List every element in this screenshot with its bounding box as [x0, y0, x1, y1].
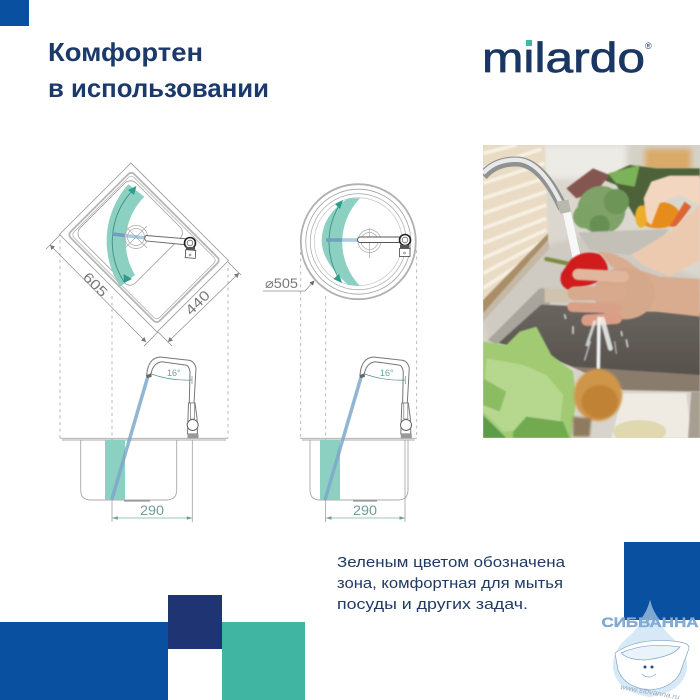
side view: round sink — [300, 357, 417, 522]
faucet top view — [145, 236, 196, 258]
upper hand and arm — [631, 176, 700, 277]
vegetables on counter — [566, 165, 700, 255]
zone arrow — [112, 186, 136, 283]
plan view: round sink — [263, 184, 417, 500]
angle 16 degrees: 16° — [167, 368, 181, 378]
side view: rectangular sink — [60, 357, 228, 522]
comfort zone — [105, 440, 125, 500]
washing hands — [572, 251, 700, 320]
drain — [356, 228, 384, 258]
dimension 440: 440 — [182, 287, 213, 318]
dimension 605: 605 — [80, 269, 111, 300]
decorative corner square — [0, 0, 29, 26]
description text: зона, комфортная для мытья — [337, 575, 563, 592]
onion — [573, 369, 622, 437]
drain — [353, 500, 377, 502]
comfort zone — [320, 440, 340, 500]
watermark: Sibvanna — [602, 600, 699, 700]
photo: washing vegetables under a faucet — [483, 145, 700, 443]
decorative squares bottom left — [0, 595, 305, 700]
bathtub — [615, 640, 689, 690]
white tray — [612, 392, 700, 438]
faucet top view — [358, 234, 410, 256]
sink outline — [60, 163, 228, 332]
dimension 290 — [326, 440, 405, 522]
description text: Зеленым цветом обозначена — [337, 554, 566, 571]
water spray — [326, 238, 358, 242]
comfort zone arc — [107, 184, 144, 287]
lettuce — [483, 327, 576, 438]
diameter label — [263, 276, 314, 291]
logo: milardo: milardo — [482, 34, 645, 81]
dimension 440 — [158, 262, 241, 346]
plan view: rectangular sink — [46, 163, 241, 500]
droplet — [613, 600, 687, 697]
sink basin — [488, 288, 700, 392]
water stream — [325, 375, 362, 500]
water splash — [565, 315, 628, 368]
decorative square bottom right — [624, 542, 700, 620]
dashed guides — [60, 240, 228, 500]
water stream — [112, 375, 148, 500]
dimension 290: 290 — [353, 502, 377, 518]
zone arrow — [329, 200, 343, 283]
title: в использовании — [48, 73, 269, 103]
url: www.sibvanna.ru — [620, 684, 680, 700]
logo: milardo: ® — [645, 41, 652, 51]
wordmark: СИБВАННА — [602, 615, 699, 630]
drain — [124, 500, 150, 502]
round sink outline — [301, 184, 416, 299]
faucet side — [359, 357, 412, 438]
dimension 290 — [112, 440, 192, 522]
angle 16 degrees: 16° — [380, 368, 394, 378]
angle 16 degrees — [150, 368, 192, 384]
faucet side — [146, 357, 198, 438]
dashed guides — [301, 250, 417, 500]
title: Комфортен — [48, 37, 203, 67]
dimension 605 — [46, 235, 158, 346]
faucet — [483, 160, 571, 214]
diameter label: ⌀505 — [265, 276, 298, 291]
sink bowl and counter — [300, 438, 417, 500]
angle 16 degrees — [364, 368, 405, 384]
title — [48, 37, 269, 103]
window blinds — [483, 145, 550, 322]
sink bowl and counter — [60, 438, 228, 500]
dimension 290: 290 — [140, 502, 164, 518]
water spray — [112, 234, 146, 238]
comfort zone crescent — [322, 198, 360, 286]
red pepper — [546, 253, 608, 290]
water stream — [563, 212, 580, 260]
drain — [124, 226, 148, 248]
description text: посуды и других задач. — [337, 596, 528, 613]
description text — [337, 554, 566, 613]
